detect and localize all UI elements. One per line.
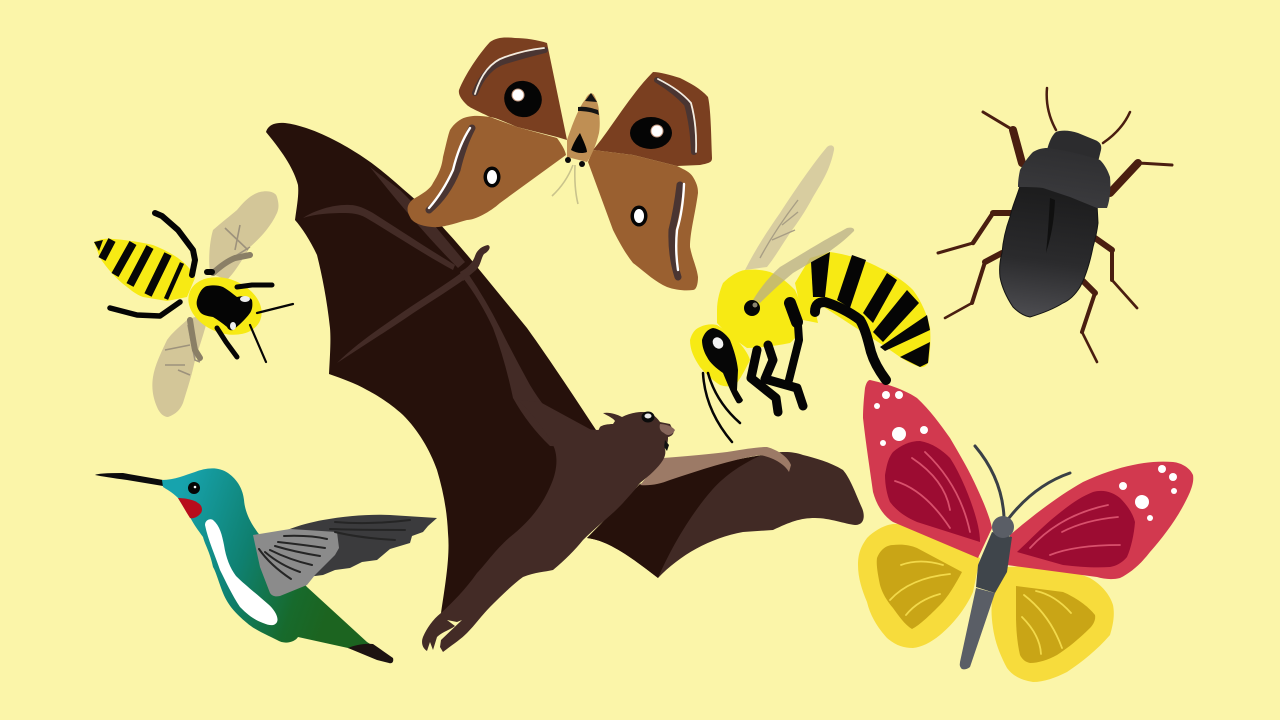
wasp <box>690 145 930 442</box>
lower right wing <box>588 150 698 290</box>
wing eyes <box>498 75 548 123</box>
beetle pronotum <box>1018 148 1110 208</box>
beetle <box>938 88 1172 362</box>
upper right wing <box>1007 462 1193 579</box>
beetle elytra <box>1000 182 1098 317</box>
lower left wing <box>858 524 980 648</box>
wing stripes <box>429 48 696 277</box>
abdomen <box>795 252 930 367</box>
honey bee <box>94 191 293 417</box>
bee legs <box>110 213 293 362</box>
eye <box>188 482 200 494</box>
upper left wing <box>863 380 992 558</box>
wing joint <box>744 300 760 316</box>
lower right wing <box>992 566 1114 682</box>
abdomen <box>960 588 995 669</box>
bat eye and nose <box>642 412 654 422</box>
far wing <box>587 452 864 578</box>
antennae <box>975 446 1070 518</box>
head <box>690 324 750 386</box>
wasp legs <box>703 302 886 442</box>
wing bones <box>303 167 600 448</box>
lower wing <box>753 228 854 303</box>
head <box>992 516 1014 538</box>
hummingbird <box>95 468 437 663</box>
bee abdomen <box>94 239 195 301</box>
bee wing roots <box>213 255 250 273</box>
grey wing <box>253 529 339 596</box>
moth <box>408 37 712 290</box>
throat <box>178 498 202 518</box>
upper left wing <box>459 37 567 140</box>
bat forearm <box>640 447 791 485</box>
bee thorax <box>180 267 270 345</box>
tail tip <box>348 644 393 663</box>
beetle legs <box>938 88 1172 362</box>
wasp wing upper <box>745 145 834 270</box>
upper right wing <box>593 72 712 166</box>
bat body <box>422 400 674 652</box>
beetle head <box>1047 131 1101 162</box>
body <box>162 468 392 662</box>
butterfly <box>858 380 1193 682</box>
bee head <box>197 285 252 330</box>
near wing <box>266 123 600 613</box>
moth body <box>567 93 600 162</box>
white belly <box>205 519 278 625</box>
abdomen stripes <box>811 252 930 367</box>
thorax <box>717 270 803 348</box>
bee wings <box>209 191 278 280</box>
lower left wing <box>408 116 566 227</box>
dark wing <box>287 515 437 577</box>
beak <box>95 473 163 486</box>
thorax <box>976 532 1012 593</box>
wing veins <box>895 452 1120 555</box>
bat <box>266 123 864 652</box>
wing dots <box>874 391 1177 521</box>
